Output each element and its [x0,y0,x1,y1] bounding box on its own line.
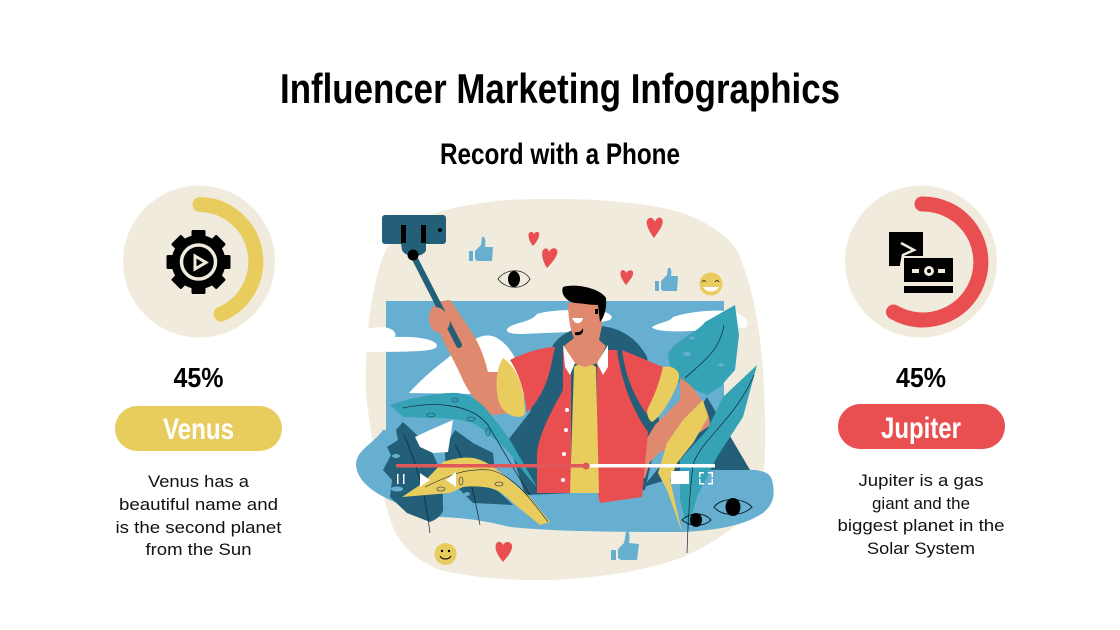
hand fingers on stick [429,307,450,332]
dark green background foliage [508,326,750,495]
smile [572,318,583,323]
jupiter description [838,471,1004,558]
jupiter description: Jupiter is a gas [858,471,984,490]
lower video panel blob [356,430,774,532]
icon: smiling emoji bottom [434,543,456,565]
venus percentage: 45% [174,362,224,393]
jupiter label pill: Jupiter [881,412,961,445]
mountains [409,336,530,395]
subtitle: Record with a Phone [440,138,680,171]
icon: eye [498,271,530,287]
icon: jupiter progress ring [845,186,997,338]
illustration: influencer taking a selfie [356,199,774,580]
jupiter description: biggest planet in the [838,516,1004,535]
jupiter label pill [838,404,1005,449]
venus description: is the second planet [116,518,282,537]
beard and ear [575,309,598,335]
icon: venus progress ring [123,186,275,338]
icons: hearts [496,218,663,562]
shirt: right front panel [597,350,648,503]
yellow leaf right [658,400,708,532]
right arm [614,378,710,478]
shirt sleeves [497,358,679,422]
shirt buttons [561,408,569,482]
jupiter description: giant and the [872,494,970,513]
yellow banana leaf [402,458,550,525]
raised left arm [430,300,525,415]
icon: smiling emoji top right [700,272,722,296]
sky panel [386,301,724,471]
dark monstera leaves [383,422,513,533]
venus label pill: Venus [163,413,234,446]
shirt: right shoulder panel [622,350,663,418]
venus description: beautiful name and [119,495,278,514]
panel: Jupiter [838,186,1005,558]
icons: thumbs up [469,237,678,560]
title: Influencer Marketing Infographics [280,65,840,112]
icon: eyes on video panel [682,498,752,527]
teal leaf left [390,393,537,495]
shirt: left front panel [537,350,571,493]
video progress bar [396,462,715,470]
icon: video screens [889,232,954,293]
venus description: from the Sun [146,540,252,559]
shirt: left shoulder panel [510,347,555,413]
venus description [116,472,282,559]
jupiter description: Solar System [867,539,975,558]
white mountain foreground [415,420,453,453]
panel: Venus [115,186,282,559]
neck and head [564,302,606,367]
icon: gear with play button [166,230,230,294]
selfie stick [382,215,459,345]
clouds [360,310,748,352]
teal leaf top right [668,305,739,395]
cream background blob [366,199,765,580]
hair [562,286,606,322]
venus description: Venus has a [148,472,250,491]
yellow t-shirt [570,363,599,493]
venus label pill [115,406,282,451]
video controls [397,471,713,487]
teal leaf right [680,365,757,553]
shirt collar [563,345,608,375]
jupiter percentage: 45% [896,362,946,393]
